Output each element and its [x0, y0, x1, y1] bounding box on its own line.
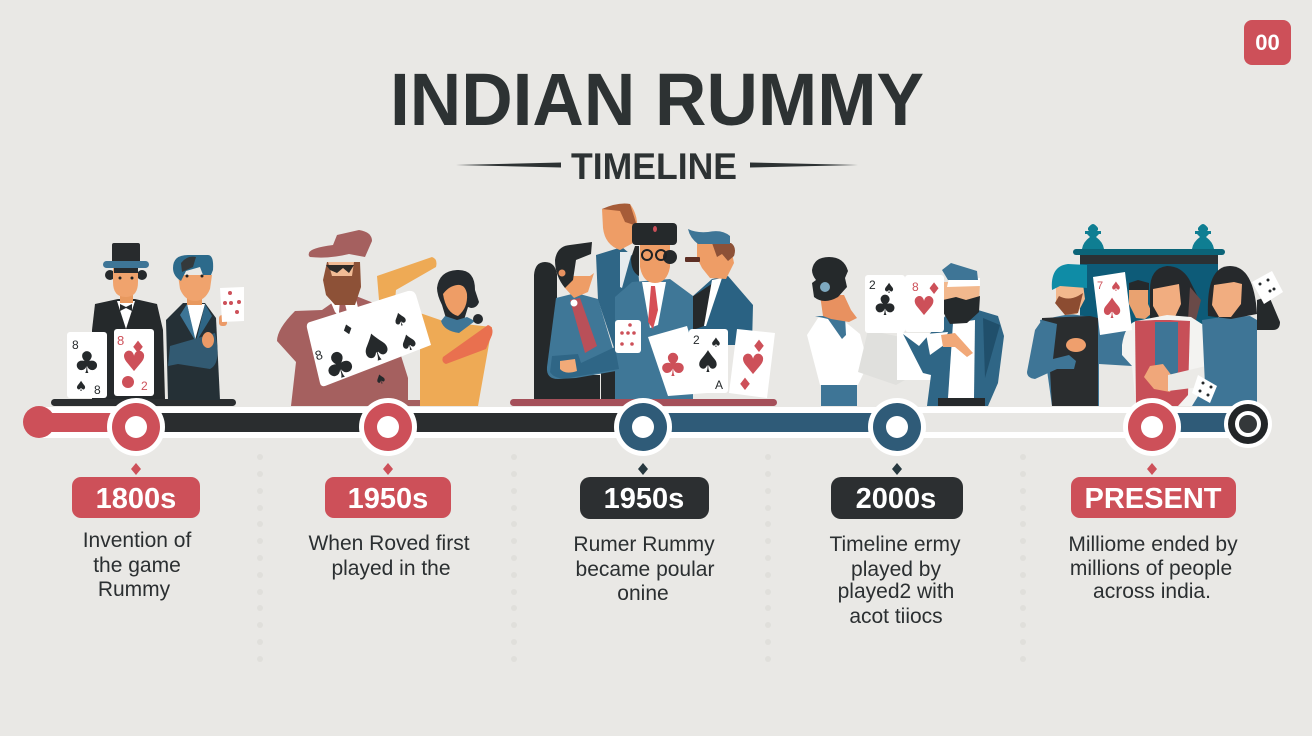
card: clubs: 2 [869, 278, 876, 292]
card: large tilted fan: ♦ [339, 321, 356, 340]
card: clubs: ♠ [75, 379, 87, 395]
column: 1950s online: onine [617, 582, 669, 605]
subtitle: TIMELINE [571, 146, 737, 187]
column: present [1068, 463, 1238, 603]
column: 1950s [308, 463, 470, 580]
card: spade: ♠ [710, 336, 722, 351]
column: 1950s: When Roved first [308, 532, 470, 555]
node: present [1123, 398, 1181, 456]
card: large tilted fan: ♠ [353, 321, 399, 374]
illustration: 2000s players [807, 257, 1004, 406]
card: hearts [905, 275, 944, 332]
card: dotted corner [1252, 271, 1283, 304]
node: 1950s red [359, 398, 417, 456]
card: small dice [1192, 375, 1217, 403]
column: 2000s: acot tiiocs [849, 605, 943, 628]
card: hearts [729, 329, 775, 398]
card: spade: ♠ [695, 345, 721, 380]
column: 1950s online [573, 463, 715, 605]
card: large tilted fan: 8 [313, 347, 325, 363]
woman's arm across [550, 347, 619, 378]
card: hearts [114, 329, 154, 396]
card: hearts: 8 [912, 280, 919, 294]
column: 2000s: played by [851, 558, 941, 581]
card: spade [689, 329, 728, 393]
column: 1950s online: became poular [576, 558, 714, 581]
column: 2000s [829, 463, 963, 628]
card: hearts: ♥ [740, 348, 766, 381]
card: large tilted fan: ♠ [396, 329, 422, 359]
column: 1950s: 1950s [348, 483, 428, 515]
node: end [1224, 400, 1272, 448]
card: large tilted fan: ♣ [318, 342, 361, 391]
card: spade: ♠ [1110, 280, 1122, 295]
column: 1800s: Rummy [98, 578, 171, 601]
column: 2000s: 2000s [856, 483, 936, 515]
column: present: across india. [1093, 580, 1211, 603]
card: hearts: ♥ [121, 345, 147, 378]
column: 1950s online: 1950s [604, 483, 684, 515]
card: small red pips [220, 287, 244, 322]
column: 1950s: played in the [331, 557, 451, 580]
card: clubs: 8 [72, 338, 79, 352]
card: clubs [865, 275, 905, 333]
illustration: present-day players [1027, 224, 1283, 406]
card: hearts: ♦ [751, 337, 767, 357]
card: hearts: ♦ [130, 338, 146, 358]
building [1073, 224, 1225, 324]
column: 1800s: Invention of [83, 529, 191, 552]
card: clubs: ♣ [872, 289, 898, 322]
card: diamond fan: ♣ [659, 346, 687, 384]
page badge [1244, 20, 1291, 65]
illustration: 1950s online group [510, 204, 777, 406]
card: spade: ♠ [1099, 292, 1125, 325]
subtitle [456, 146, 858, 187]
card: clubs: 8 [94, 383, 101, 397]
card: spade: 7 [1097, 280, 1103, 292]
card: small pips [615, 320, 641, 353]
column: present: PRESENT [1085, 483, 1222, 515]
card: clubs: ♠ [883, 281, 895, 297]
node: 2000s [868, 398, 926, 456]
card: spade: A [715, 378, 723, 392]
title: INDIAN RUMMY [390, 58, 924, 141]
card: hearts: ♥ [912, 292, 936, 322]
column: 1950s online: Rumer Rummy [573, 533, 715, 556]
column: 2000s: played2 with [838, 580, 954, 603]
column separators [257, 454, 1026, 662]
card: spade [1093, 272, 1132, 335]
column: 1800s: the game [93, 554, 181, 577]
column: present: Milliome ended by [1068, 533, 1238, 556]
card: hearts: ♦ [927, 279, 941, 298]
illustration: 1950s players [277, 230, 492, 406]
card: clubs [67, 332, 107, 398]
card: spade: 2 [693, 333, 700, 347]
card: hearts: 2 [141, 379, 148, 393]
node: 1950s blue [614, 398, 672, 456]
card: large tilted fan: ♠ [389, 308, 411, 333]
timeline bar [23, 398, 1272, 456]
page badge: 00 [1255, 30, 1280, 55]
card: hearts: ♦ [737, 375, 753, 395]
card: large tilted fan [307, 291, 431, 404]
column: 1800s [72, 463, 200, 601]
card: large tilted fan: ♠ [373, 371, 389, 389]
card: hearts: 8 [117, 333, 124, 348]
node: 1800s [107, 398, 165, 456]
card: clubs: ♣ [74, 346, 100, 381]
column: 2000s: Timeline ermy [829, 533, 961, 556]
card: diamond fan [648, 326, 707, 396]
illustration: 1800s players [51, 243, 244, 406]
column: 1800s: 1800s [96, 483, 176, 515]
column: present: millions of people [1070, 557, 1232, 580]
